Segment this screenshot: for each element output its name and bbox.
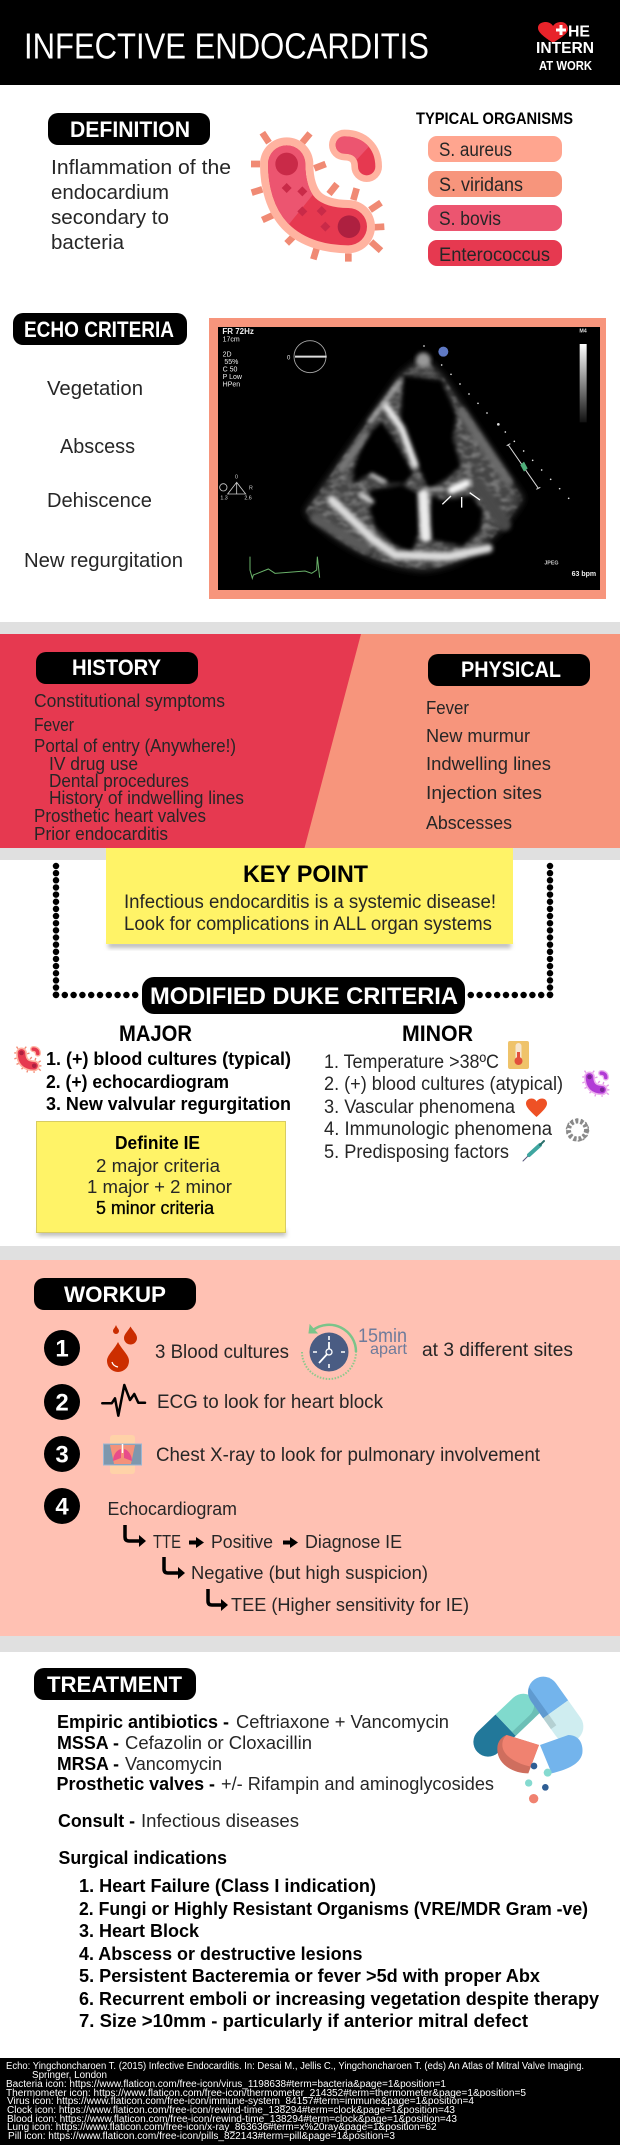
panel: workup — [0, 1246, 620, 1652]
header bar — [0, 0, 620, 85]
white section — [0, 860, 620, 1246]
TTE pathway text: TTE — [153, 1532, 181, 1552]
step 4 number: 4 — [55, 1494, 69, 1520]
consult line — [58, 1811, 299, 1831]
minor list: 3. Vascular phenomena — [324, 1097, 515, 1118]
treatment heading: TREATMENT — [47, 1672, 183, 1697]
echo criteria list: New regurgitation — [24, 550, 183, 572]
arrow: TTE to negative — [164, 1557, 185, 1579]
definition heading — [48, 113, 210, 145]
TTE pathway text: Diagnose IE — [305, 1532, 402, 1552]
TTE pathway text — [153, 1532, 402, 1552]
surgical indications list: 4. Abscess or destructive lesions — [79, 1944, 362, 1964]
arrow: positive to diagnose — [283, 1537, 298, 1548]
minor list: 5. Predisposing factors — [324, 1142, 509, 1163]
major heading: MAJOR — [119, 1021, 192, 1046]
step 1 number: 1 — [55, 1336, 69, 1362]
title: INFECTIVE ENDOCARDITIS — [24, 26, 429, 66]
echo criteria list: Dehiscence — [47, 490, 152, 512]
definition text: Inflammation of the — [51, 157, 231, 179]
clock label: 15min — [358, 1326, 407, 1347]
definite IE box — [36, 1122, 286, 1236]
echo overlay text: M4 — [579, 329, 587, 335]
definition text: secondary to — [51, 207, 169, 229]
surgical indications list: 7. Size >10mm - particularly if anterior mitral defect — [79, 2011, 528, 2031]
organism: S. viridans: S. viridans — [439, 175, 523, 196]
surgical indications list: 2. Fungi or Highly Resistant Organisms (VRE/MDR Gram -ve) — [79, 1899, 588, 1919]
history list: IV drug use — [49, 754, 138, 774]
step 1 sites text: at 3 different sites — [422, 1340, 573, 1361]
major list: 2. (+) echocardiogram — [46, 1072, 229, 1092]
footer references: Echo: Yingchoncharoen T. (2015) Infective Endocarditis. In: Desai M., Jellis C., Yingchoncharoen T. (eds) An Atlas of Mitral Valve Imaging. — [6, 2061, 584, 2072]
major list: 1. (+) blood cultures (typical) — [46, 1049, 291, 1069]
definition text: bacteria — [51, 232, 125, 254]
organism: S. aureus: S. aureus — [439, 140, 512, 161]
clock label — [358, 1326, 408, 1358]
panel: history and physical — [0, 634, 620, 848]
antibiotic lines: Cefazolin or Cloxacillin — [125, 1733, 312, 1753]
logo: AT WORK — [539, 58, 593, 73]
history heading — [36, 652, 198, 684]
organism: S. bovis: S. bovis — [439, 209, 501, 230]
physical list: New murmur — [426, 726, 530, 746]
echo overlay text: R — [249, 486, 253, 492]
negative text: Negative (but high suspicion) — [191, 1563, 428, 1583]
antibiotic lines — [56, 1712, 494, 1794]
key point text: Look for complications in ALL organ systems — [124, 914, 492, 935]
definite IE box: 2 major criteria — [96, 1156, 221, 1176]
organisms heading: TYPICAL ORGANISMS — [416, 109, 573, 128]
surgical indications heading: Surgical indications — [58, 1848, 227, 1868]
echo overlay text: FR 72Hz — [222, 327, 254, 336]
echo criteria heading: ECHO CRITERIA — [24, 317, 174, 342]
footer references: Lung icon: https://www.flaticon.com/free-icon/x-ray_863636#term=x%20ray&page=1&position=62 — [7, 2122, 437, 2133]
history list: Fever — [34, 715, 74, 735]
surgical indications list: 5. Persistent Bacteremia or fever >5d with proper Abx — [79, 1966, 540, 1986]
footer references: Virus icon: https://www.flaticon.com/free-icon/immune-system_84157#term=immune&page=1&position=4 — [7, 2096, 474, 2107]
logo: HE — [568, 24, 590, 41]
organism: S. bovis — [428, 205, 562, 231]
organism: S. aureus — [428, 136, 562, 162]
icon: clock — [302, 1325, 356, 1379]
physical list: Injection sites — [426, 783, 542, 803]
echocardiogram image — [209, 318, 606, 599]
echo overlay text: 1.3 — [220, 496, 228, 502]
dotted connector — [56, 866, 550, 995]
definite IE box: Definite IE — [115, 1133, 200, 1153]
workup heading — [34, 1278, 196, 1310]
definition text: endocardium — [51, 182, 169, 204]
echo criteria list: Abscess — [60, 436, 135, 458]
step 2 text: ECG to look for heart block — [157, 1392, 383, 1413]
definite IE box: 5 minor criteria — [96, 1198, 215, 1218]
icon: chest x-ray — [104, 1435, 142, 1474]
definition heading: DEFINITION — [70, 117, 190, 142]
key point heading: KEY POINT — [243, 861, 368, 888]
echo overlay text: HPen — [223, 381, 240, 388]
antibiotic lines: Vancomycin — [125, 1754, 222, 1774]
icon: ECG — [102, 1385, 145, 1416]
step 3 text: Chest X-ray to look for pulmonary involvement — [156, 1445, 541, 1466]
icon: immune ring — [566, 1119, 588, 1141]
echo overlay text: 17cm — [223, 336, 240, 343]
minor heading: MINOR — [402, 1021, 473, 1046]
footer references: Blood icon: https://www.flaticon.com/free-icon/rewind-time_138294#term=clock&page=1&position=43 — [7, 2114, 457, 2125]
major criteria — [14, 1021, 291, 1114]
TEE text: TEE (Higher sensitivity for IE) — [231, 1595, 469, 1615]
icon: purple bacteria — [582, 1071, 609, 1097]
treatment section — [34, 1668, 599, 2031]
arrow: TTE to positive — [189, 1537, 204, 1548]
antibiotic lines: MRSA - — [57, 1754, 119, 1774]
clock label: apart — [370, 1341, 408, 1358]
minor list: 1. Temperature >38ºC — [324, 1052, 499, 1073]
treatment heading — [34, 1668, 196, 1700]
step 2 number — [44, 1384, 80, 1420]
key point box — [106, 848, 513, 948]
echo criteria heading — [13, 313, 187, 345]
history list: Prosthetic heart valves — [34, 806, 206, 826]
workup heading: WORKUP — [64, 1282, 166, 1307]
echo overlay text: 2D — [223, 352, 232, 359]
step 4 text: Echocardiogram — [108, 1499, 237, 1519]
antibiotic lines: MSSA - — [57, 1733, 119, 1753]
major list: 3. New valvular regurgitation — [46, 1094, 291, 1114]
physical list: Fever — [426, 698, 469, 718]
minor criteria — [324, 1021, 609, 1163]
footer references: Bacteria icon: https://www.flaticon.com/free-icon/virus_1198638#term=bacteria&page=1&position=1 — [6, 2079, 446, 2090]
consult line: Consult - — [58, 1811, 135, 1831]
definite IE box: 1 major + 2 minor — [87, 1177, 232, 1197]
footer references: Springer, London — [32, 2070, 107, 2081]
history list: History of indwelling lines — [49, 788, 244, 808]
step 4 number — [44, 1488, 80, 1524]
physical heading: PHYSICAL — [461, 657, 561, 682]
major list — [46, 1049, 291, 1114]
surgical indications list: 1. Heart Failure (Class I indication) — [79, 1876, 376, 1896]
echo overlay text: 63 bpm — [572, 571, 596, 578]
step 3 number — [44, 1436, 80, 1472]
icon: pills — [467, 1671, 589, 1803]
organism: S. viridans — [428, 171, 562, 197]
history heading: HISTORY — [72, 655, 161, 680]
organism: Enterococcus: Enterococcus — [439, 245, 550, 266]
echo overlay text: JPEG — [544, 560, 559, 566]
history list: Constitutional symptoms — [34, 691, 225, 711]
echo criteria list: Vegetation — [47, 378, 143, 400]
footer references: Pill icon: https://www.flaticon.com/free-icon/pills_822143#term=pill&page=1&position=3 — [8, 2131, 395, 2142]
organism: Enterococcus — [428, 240, 562, 266]
logo — [536, 22, 594, 73]
step 1 number — [44, 1330, 80, 1366]
step 3 number: 3 — [55, 1442, 69, 1468]
footer references: Clock icon: https://www.flaticon.com/free-icon/rewind-time_138294#term=clock&page=1&position=43 — [7, 2105, 455, 2116]
echo overlay text: 2.6 — [244, 496, 252, 502]
step 2 number: 2 — [55, 1390, 69, 1416]
echo overlay text: P Low — [223, 374, 243, 381]
section divider — [0, 622, 620, 860]
surgical indications list: 3. Heart Block — [79, 1921, 200, 1941]
surgical indications list — [79, 1876, 599, 2031]
minor list: 4. Immunologic phenomena — [324, 1119, 552, 1140]
step 1 text: 3 Blood cultures — [155, 1342, 289, 1363]
physical list — [426, 698, 551, 833]
TTE pathway text: Positive — [211, 1532, 273, 1552]
modified duke criteria heading: MODIFIED DUKE CRITERIA — [150, 983, 458, 1010]
typical organisms — [416, 109, 573, 266]
echo overlay text: 55% — [224, 359, 238, 366]
surgical indications list: 6. Recurrent emboli or increasing vegetation despite therapy — [79, 1989, 599, 2009]
physical list: Abscesses — [426, 813, 512, 833]
history list: Portal of entry (Anywhere!) — [34, 736, 236, 756]
echo overlay text — [220, 327, 596, 578]
icon: blood drops — [107, 1325, 137, 1372]
history list — [34, 691, 244, 844]
echo overlay text: 0 — [235, 474, 238, 480]
minor list — [324, 1052, 563, 1163]
history list: Dental procedures — [49, 771, 189, 791]
antibiotic lines: Prosthetic valves - — [56, 1774, 215, 1794]
key point text — [124, 892, 496, 935]
consult line: Infectious diseases — [141, 1811, 299, 1831]
echo overlay text: 0 — [287, 356, 291, 362]
footer references — [0, 2058, 620, 2145]
physical list: Indwelling lines — [426, 754, 551, 774]
logo: INTERN — [536, 40, 594, 57]
history list: Prior endocarditis — [34, 824, 168, 844]
physical heading — [428, 654, 590, 686]
footer references: Thermometer icon: https://www.flaticon.com/free-icon/thermometer_214352#term=thermometer&page=1&position=5 — [6, 2088, 526, 2099]
arrow: negative to TEE — [208, 1589, 228, 1611]
antibiotic lines: +/- Rifampin and aminoglycosides — [221, 1774, 494, 1794]
echo criteria list — [24, 378, 183, 572]
key point text: Infectious endocarditis is a systemic disease! — [124, 892, 496, 913]
definition text — [51, 157, 231, 254]
icon: bacteria — [251, 133, 384, 262]
icon: small bacteria — [14, 1047, 41, 1073]
minor list: 2. (+) blood cultures (atypical) — [324, 1074, 563, 1095]
icon: heart — [526, 1098, 547, 1117]
icon: syringe — [523, 1141, 544, 1161]
arrow: echo to TTE — [125, 1525, 146, 1547]
icon: thermometer — [508, 1041, 529, 1069]
antibiotic lines: Ceftriaxone + Vancomycin — [236, 1712, 449, 1732]
antibiotic lines: Empiric antibiotics - — [57, 1712, 229, 1732]
echo overlay text: C 50 — [223, 367, 238, 374]
